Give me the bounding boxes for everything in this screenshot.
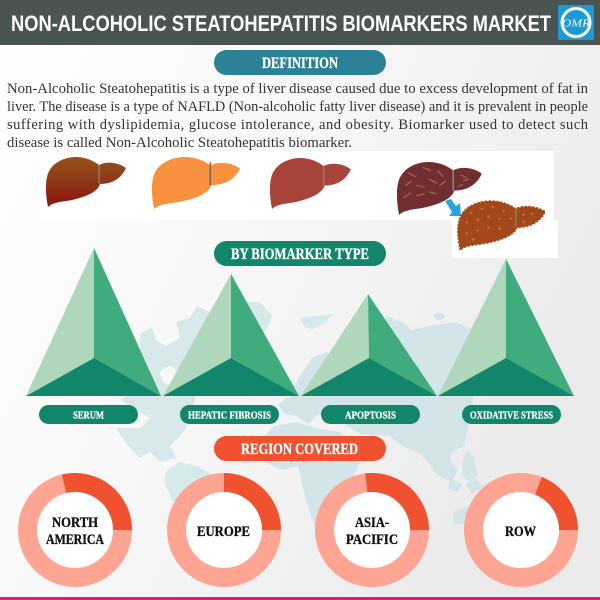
label: serum	[39, 405, 138, 424]
icon: fatty liver	[152, 157, 240, 209]
label: hepatic fibrosis: HEPATIC FIBROSIS	[188, 410, 271, 422]
by biomarker type heading	[214, 241, 386, 266]
pyramid: oxidative stress	[438, 259, 574, 396]
region covered heading: REGION COVERED	[241, 441, 358, 458]
icon: liver healthy	[46, 157, 126, 207]
definition text block: Non-Alcoholic Steatohepatitis is a type of liver disease caused due to excess development of fat in	[7, 81, 589, 97]
pyramid: apoptosis	[301, 294, 437, 396]
pyramid chart: biomarker types	[26, 248, 574, 396]
footer bar	[0, 597, 600, 600]
icon: fibrotic liver	[397, 162, 482, 215]
icon: inflamed liver	[270, 158, 351, 209]
donut: rest of world	[464, 473, 578, 587]
icon: cirrhotic liver	[458, 201, 545, 250]
definition text block	[7, 81, 589, 151]
donut: north america: NORTH	[52, 515, 98, 531]
definition text block: disease is called Non-Alcoholic Steatohepatitis biomarker.	[7, 135, 352, 151]
pyramid: hepatic fibrosis	[163, 274, 299, 396]
donut: asia-pacific: PACIFIC	[346, 532, 398, 548]
world map background	[116, 302, 490, 530]
by biomarker type heading: BY BIOMARKER TYPE	[231, 246, 369, 263]
label: oxidative stress	[462, 405, 561, 424]
donut: europe	[167, 473, 281, 587]
liver images panel	[40, 151, 558, 258]
label: apoptosis	[321, 405, 420, 424]
header bar	[0, 0, 600, 45]
donut: europe: EUROPE	[197, 524, 250, 540]
label: oxidative stress: OXIDATIVE STRESS	[470, 410, 553, 422]
label: apoptosis: APOPTOSIS	[345, 410, 396, 422]
icon: OMR logo: OMR	[562, 18, 590, 30]
icon: OMR logo	[558, 5, 594, 40]
arrow: progression	[445, 199, 461, 216]
definition heading	[214, 50, 386, 75]
pyramid: serum	[26, 248, 161, 396]
definition text block: liver. The disease is a type of NAFLD (Non-alcoholic fatty liver disease) and it is prevalent in people	[7, 99, 588, 115]
donut: asia-pacific: ASIA-	[355, 515, 389, 531]
region covered heading	[214, 436, 386, 461]
label: hepatic fibrosis	[180, 405, 279, 424]
donut: north america: AMERICA	[46, 532, 104, 548]
definition heading: DEFINITION	[262, 55, 338, 72]
donut: rest of world: ROW	[505, 524, 536, 540]
label: serum: SERUM	[73, 410, 104, 422]
donut: asia-pacific	[315, 473, 429, 587]
donut: north america	[18, 473, 132, 587]
definition text block: suffering with dyslipidemia, glucose intolerance, and obesity. Biomarker used to detect such	[7, 117, 589, 133]
